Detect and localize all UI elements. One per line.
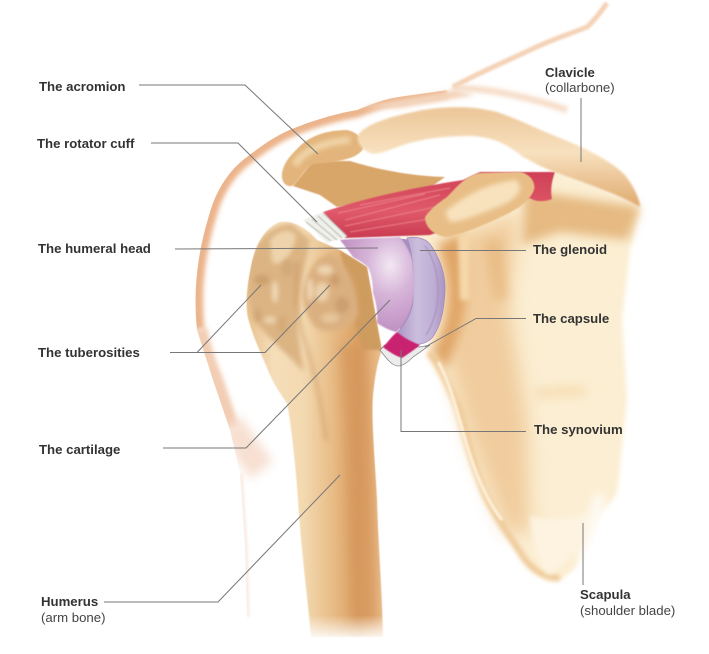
label: the glenoid: The glenoid bbox=[533, 242, 607, 257]
tissue behind joint bbox=[396, 238, 420, 335]
skin outline: arm and shoulder bbox=[196, 3, 607, 617]
label: scapula bbox=[580, 587, 675, 618]
humerus bbox=[247, 222, 396, 641]
label: the synovium: The synovium bbox=[534, 422, 623, 437]
coracoid process bbox=[425, 172, 534, 237]
synovium with capsule bbox=[380, 332, 430, 366]
label: humerus: Humerus bbox=[41, 594, 98, 609]
clavicle bbox=[358, 107, 640, 207]
label: the rotator cuff: The rotator cuff bbox=[37, 136, 135, 151]
scapula bbox=[400, 172, 640, 581]
label: the humeral head: The humeral head bbox=[38, 241, 151, 256]
acromion highlight bbox=[295, 140, 350, 165]
glenoid bbox=[398, 237, 445, 344]
label: scapula: (shoulder blade) bbox=[580, 603, 675, 618]
label: clavicle: (collarbone) bbox=[545, 80, 615, 95]
label: scapula: Scapula bbox=[580, 587, 631, 602]
label: humerus: (arm bone) bbox=[41, 610, 106, 625]
label: clavicle: Clavicle bbox=[545, 65, 595, 80]
acromion bbox=[282, 130, 363, 186]
label: the acromion: The acromion bbox=[39, 79, 125, 94]
rotator cuff muscle bbox=[323, 172, 555, 238]
label: the tuberosities: The tuberosities bbox=[38, 345, 140, 360]
scapular spine underside bbox=[293, 161, 445, 207]
label: humerus bbox=[41, 594, 106, 625]
humerus: tuberosity mottling bbox=[254, 259, 293, 334]
label: the capsule: The capsule bbox=[533, 311, 609, 326]
label: the cartilage: The cartilage bbox=[39, 442, 120, 457]
cartilage bbox=[340, 237, 414, 332]
leader lines bbox=[104, 85, 583, 602]
rotator cuff tendon bbox=[303, 212, 347, 243]
label: clavicle bbox=[545, 65, 615, 95]
